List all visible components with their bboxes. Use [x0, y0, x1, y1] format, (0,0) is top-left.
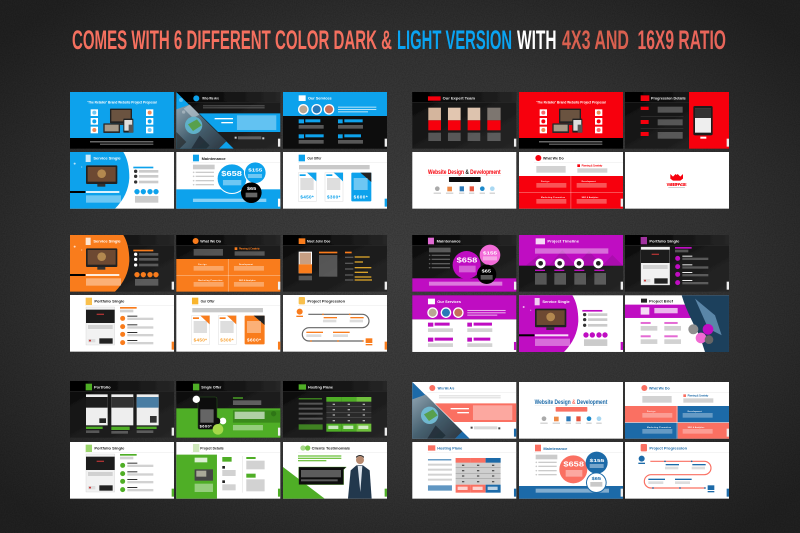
slide: orange what we do [176, 235, 280, 292]
slide: green testimonials: Clients Testimonials [312, 447, 350, 451]
slide: purple portfolio single [625, 235, 729, 292]
slide: coral what we do: Design [647, 411, 656, 413]
slide: orange offer: Our Offer [201, 300, 215, 304]
slide: coral what we do: SEO & Analytics [688, 426, 705, 429]
slide: purple service single [519, 295, 623, 352]
slide: purple service single: Service Single [542, 300, 570, 304]
red version slides [412, 92, 729, 209]
slide: red what we do: Design [541, 181, 550, 183]
slide: coral maintenance [519, 442, 623, 499]
slide: orange portfolio single: Portfolio Single [94, 300, 124, 304]
slide: green project details [176, 442, 280, 499]
slide: coral what we do [625, 382, 729, 439]
slide: blue maintenance: $155 [248, 167, 263, 173]
slide: orange service single [70, 235, 174, 292]
slide: red logo [625, 152, 729, 209]
slide: coral what we do: What We Do [649, 387, 670, 391]
slide: orange offer: $600* [247, 338, 261, 343]
slide: green project details: Project Details [200, 447, 224, 451]
slide: red website design: Website Design & Development [428, 170, 501, 176]
slide: green testimonials [283, 442, 387, 499]
slide: coral maintenance: $65 [592, 476, 601, 482]
slide: coral who we are [412, 382, 516, 439]
slide: coral website design: Website Design & Development [535, 400, 607, 406]
slide: blue services [283, 92, 387, 149]
slide: purple maintenance [412, 235, 516, 292]
title: 16X9 RATIO [638, 25, 726, 55]
slide: red what we do [519, 152, 623, 209]
slide: orange what we do: Development [239, 263, 253, 266]
slide: blue proposal: 'The Retailer' Brand Website Project Proposal [87, 100, 157, 104]
slide: purple maintenance: Maintenance [437, 240, 461, 244]
slide: blue offer: $300* [327, 195, 341, 200]
purple version slides [412, 235, 729, 352]
slide: blue service single [70, 152, 174, 209]
slide: blue who we are [176, 92, 280, 149]
slide: blue services: Our Services [308, 97, 332, 101]
slide: red logo: WEBPAGE [667, 182, 687, 188]
slide: orange offer: $450* [194, 338, 207, 343]
coral and navy version slides [412, 382, 729, 499]
slide: purple services [412, 295, 516, 352]
slide: red what we do: Development [582, 180, 596, 183]
slide: orange progression [283, 295, 387, 352]
title: 4X3 AND [562, 25, 629, 55]
slide: green single offer [176, 381, 280, 438]
slide: purple project timeline: Project Timeline [547, 240, 579, 244]
title: WITH [517, 25, 556, 55]
slide: coral progression: Project Progression [649, 447, 687, 451]
slide: blue who we are: Who We Are [202, 97, 219, 101]
slide: green portfolio single: Portfolio Single [94, 447, 124, 451]
slide: purple maintenance: $658 [457, 257, 477, 264]
slide: red what we do: Marketing Promotion [541, 196, 566, 199]
slide: green portfolio single [70, 442, 174, 499]
slide: coral what we do: Marketing Promotion [647, 426, 672, 429]
slide: blue offer: $450* [300, 195, 314, 200]
slide: coral maintenance: $155 [590, 458, 605, 464]
slide: purple services: Our Services [437, 300, 461, 304]
green version slides [70, 381, 387, 499]
slide: blue service single: Service Single [93, 157, 121, 161]
slide: orange meet john doe: Meet John Doe [307, 240, 330, 244]
slide: orange what we do: What We Do [200, 240, 222, 244]
slide: orange progression: Project Progression [307, 300, 345, 304]
slide: orange service single: Service Single [93, 240, 121, 244]
slide: blue maintenance [176, 152, 280, 209]
slide: purple project brief: Project Brief [649, 300, 674, 304]
slide: blue offer: $600* [354, 195, 368, 200]
slide: purple maintenance: $155 [483, 250, 497, 256]
slide: orange what we do: SEO & Analytics [239, 279, 257, 282]
slide: orange what we do: Planning & Creativity [239, 248, 260, 251]
slide: green single offer: Single Offer [201, 386, 222, 390]
slide: green portfolio [70, 381, 174, 438]
slide: orange offer [176, 295, 280, 352]
slide: red proposal: 'The Retailer' Brand Website Project Proposal [536, 100, 606, 104]
slide: red what we do: SEO & Analytics [582, 196, 599, 199]
slide: red expert team: Our Expert Team [443, 97, 476, 101]
blue version slides [70, 92, 387, 209]
slide: green hosting plan: Hosting Plane [308, 386, 333, 390]
slide: coral what we do: Development [688, 410, 702, 413]
orange version slides [70, 235, 387, 352]
slide: red what we do: Planning & Creativity [582, 165, 603, 168]
slide: green portfolio: Portfolio [94, 386, 112, 390]
slide: red website design [412, 152, 516, 209]
slide: blue maintenance: Maintenance [202, 157, 226, 161]
slide: red progression details [625, 92, 729, 149]
slide: purple project brief [625, 295, 729, 352]
slide: orange what we do: Marketing Promotion [198, 279, 223, 282]
slide: red progression details: Progression Details [651, 97, 686, 101]
slide: red what we do: What We Do [543, 157, 564, 161]
slide: coral what we do: Planning & Creativity [688, 395, 709, 398]
slide: purple portfolio single: Portfolio Single [649, 240, 679, 244]
slide: coral hosting plan: Hosting Plane [437, 447, 462, 451]
slide: coral hosting plan [412, 442, 516, 499]
title: LIGHT VERSION [397, 25, 512, 55]
slide: coral website design [519, 382, 623, 439]
slide: blue maintenance: $658 [221, 169, 242, 178]
slide: coral who we are: Who We Are [438, 387, 454, 391]
slide: orange what we do: Design [198, 264, 207, 266]
slide: green hosting plan [283, 381, 387, 438]
slide: green single offer: $600* [200, 424, 212, 429]
title: COMES WITH 6 DIFFERENT COLOR DARK & [72, 25, 392, 55]
slide: coral progression [625, 442, 729, 499]
slide: red proposal [519, 92, 623, 149]
slide: orange offer: $300* [220, 338, 234, 343]
slide: orange portfolio single [70, 295, 174, 352]
slide: blue maintenance: $65 [247, 186, 257, 192]
slide: blue offer: Our Offer [307, 157, 322, 161]
slide: blue offer [283, 152, 387, 209]
slide: red expert team [412, 92, 516, 149]
slide: purple project timeline [519, 235, 623, 292]
slide: coral maintenance: Maintenance [543, 447, 567, 451]
slide: orange meet john doe [283, 235, 387, 292]
slide: purple maintenance: $65 [482, 268, 491, 274]
slide: coral maintenance: $658 [563, 462, 584, 469]
slide: blue proposal [70, 92, 174, 149]
